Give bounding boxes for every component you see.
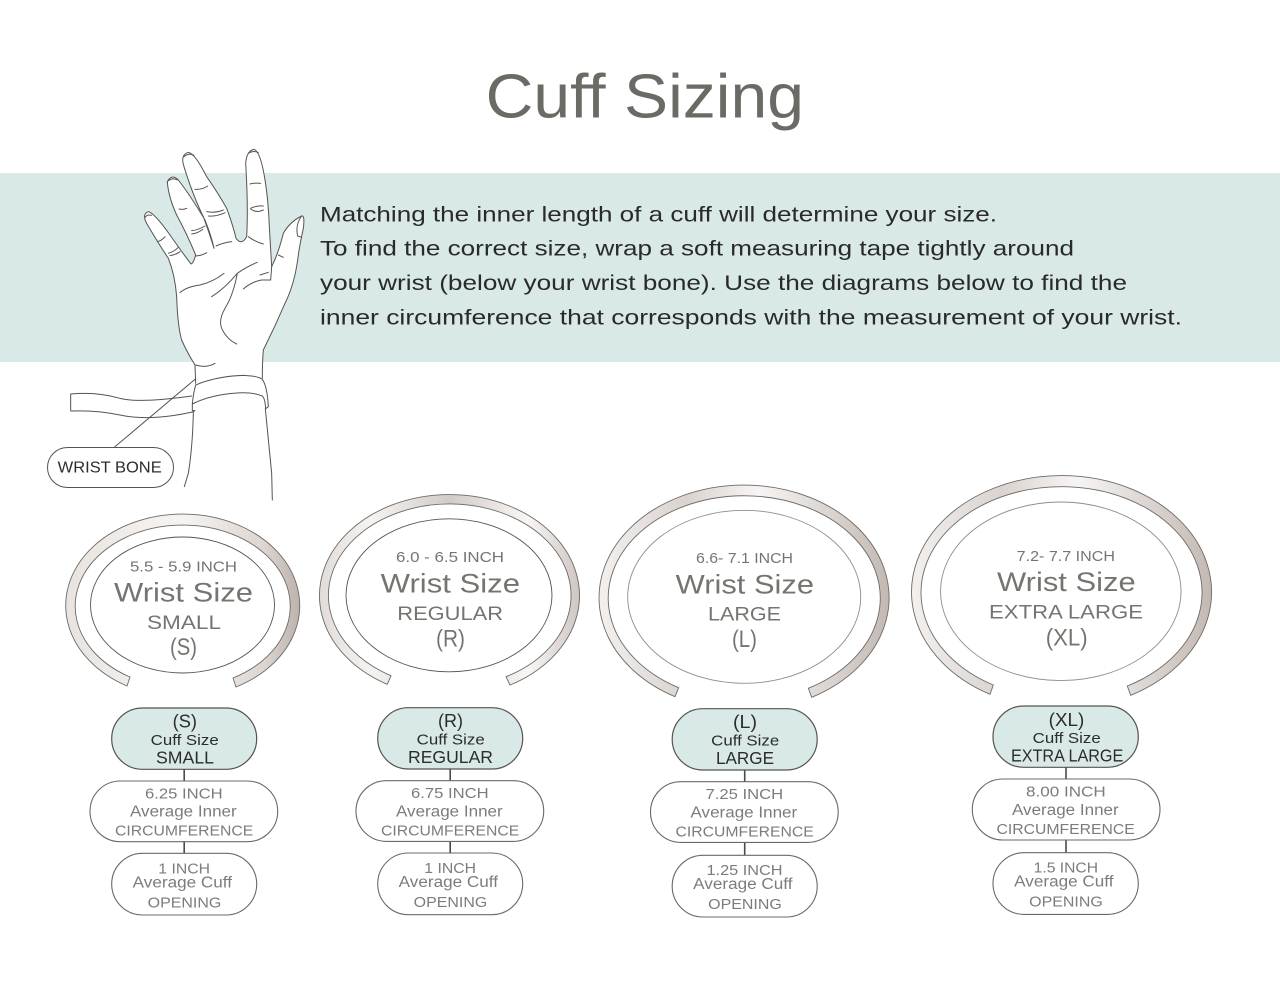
column: small [66, 514, 300, 915]
size pills: small: Average Inner [130, 804, 237, 821]
cuff diagram: large: LARGE [708, 604, 781, 626]
size pills: small: SMALL [156, 747, 214, 767]
size pills: large: Cuff Size [711, 733, 779, 750]
text block: instructions: your wrist (below your wrist bone). Use the diagrams below to find the [320, 272, 1127, 295]
cuff diagram: small: 5.5 - 5.9 INCH [130, 559, 237, 576]
size pills: large: CIRCUMFERENCE [676, 823, 814, 840]
size pills: regular: 1 INCH [424, 860, 476, 877]
size pills: large: Average Inner [690, 804, 797, 821]
size pills: regular: Average Cuff [399, 874, 499, 891]
size pills: large: 1.25 INCH [706, 862, 782, 879]
cuff diagram: extra large: (XL) [1046, 625, 1088, 652]
size pills: small: Cuff Size [151, 732, 219, 749]
size pills: regular: CIRCUMFERENCE [381, 822, 519, 839]
size pills: small: OPENING [148, 894, 221, 911]
size pills: large: 7.25 INCH [706, 786, 783, 803]
cuff diagram: small: SMALL [147, 612, 221, 634]
size pills: small [90, 708, 278, 915]
text block: instructions: inner circumference that corresponds with the measurement of your wrist. [320, 306, 1182, 329]
size pills: regular: OPENING [414, 894, 487, 911]
size pills: large: Average Cuff [693, 876, 793, 893]
text block: instructions: Matching the inner length of a cuff will determine your size. [320, 204, 997, 227]
column: regular [319, 495, 579, 915]
size pills: extra large: OPENING [1029, 894, 1103, 910]
callout: wrist bone: WRIST BONE [58, 460, 162, 477]
cuff diagram: small [66, 514, 300, 687]
cuff diagram: regular [319, 495, 579, 685]
size pills: extra large: EXTRA LARGE [1011, 746, 1123, 766]
text block: instructions: To find the correct size, wrap a soft measuring tape tightly around [320, 238, 1074, 261]
size pills: extra large: 1.5 INCH [1034, 860, 1098, 877]
cuff diagram: small: Wrist Size [114, 578, 253, 608]
cuff diagram: extra large: 7.2- 7.7 INCH [1017, 548, 1115, 565]
size pills: regular: Cuff Size [417, 732, 485, 749]
size pills: small: (S) [173, 711, 197, 731]
size pills: regular: Average Inner [396, 803, 503, 820]
cuff diagram: large: Wrist Size [676, 569, 814, 599]
pointer line [115, 379, 195, 447]
size pills: extra large: Average Cuff [1014, 874, 1114, 891]
cuff diagram: large: (L) [732, 626, 757, 653]
callout: wrist bone [48, 448, 174, 488]
size pills: extra large [972, 706, 1160, 914]
cuff diagram: extra large [912, 476, 1212, 695]
size pills: large [650, 709, 838, 917]
cuff diagram: extra large: Wrist Size [997, 567, 1136, 597]
size pills: extra large: CIRCUMFERENCE [996, 821, 1135, 838]
cuff diagram: regular: 6.0 - 6.5 INCH [396, 549, 504, 566]
cuff diagram: large: 6.6- 7.1 INCH [696, 550, 793, 567]
text block: instructions [320, 204, 1182, 329]
column: extra large [912, 476, 1212, 914]
size pills: small: 6.25 INCH [145, 785, 223, 802]
size pills: small: CIRCUMFERENCE [115, 823, 253, 840]
size pills: extra large: (XL) [1049, 710, 1084, 730]
panel: instruction banner [0, 173, 1280, 362]
cuff diagram: extra large: EXTRA LARGE [989, 601, 1143, 623]
cuff diagram: regular: REGULAR [397, 603, 503, 625]
icon: hand with measuring tape [71, 149, 304, 500]
size pills: small: 1 INCH [158, 860, 210, 877]
size pills: extra large: 8.00 INCH [1026, 784, 1106, 800]
size pills: extra large: Average Inner [1012, 802, 1119, 819]
cuff diagram: large [599, 485, 889, 697]
cuff diagram: regular: (R) [436, 626, 465, 653]
cuff diagram: small: (S) [170, 634, 197, 661]
size pills: small: Average Cuff [133, 874, 233, 891]
column: large [599, 485, 889, 917]
cuff diagram: regular: Wrist Size [381, 568, 520, 598]
size pills: large: LARGE [716, 748, 774, 768]
size pills: extra large: Cuff Size [1033, 730, 1101, 747]
size pills: large: (L) [733, 712, 757, 732]
tape [192, 375, 268, 409]
size pills: regular: (R) [438, 711, 463, 731]
size pills: regular [356, 708, 544, 915]
size pills: regular: 6.75 INCH [411, 785, 489, 802]
title: Cuff Sizing [486, 63, 804, 132]
size pills: large: OPENING [708, 896, 782, 913]
size pills: regular: REGULAR [408, 747, 493, 767]
